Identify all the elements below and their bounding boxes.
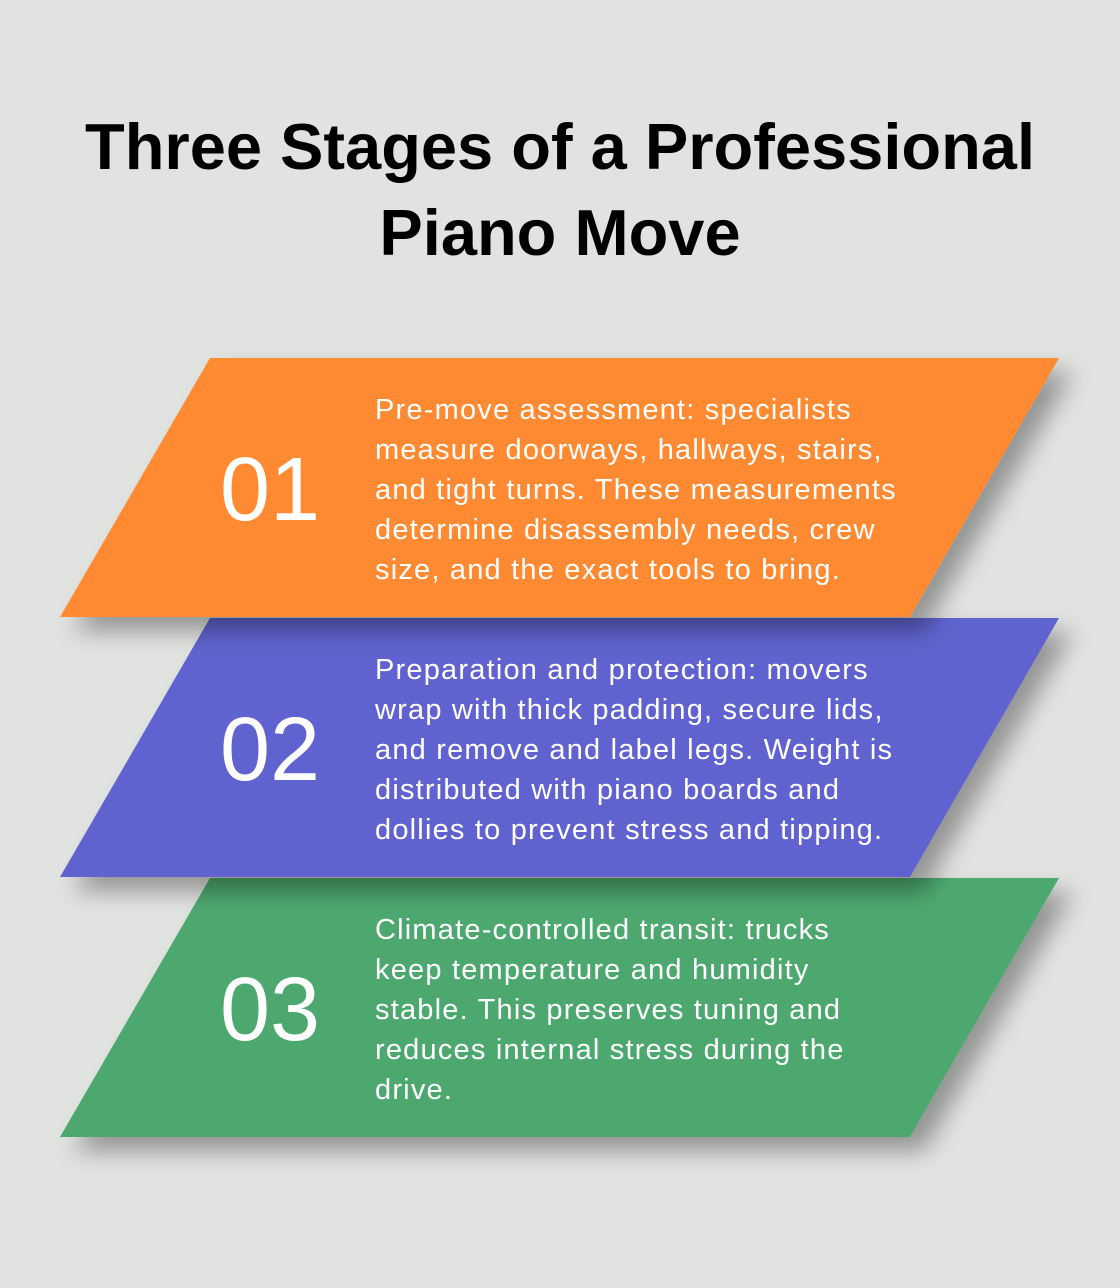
text stage 2: dollies to prevent stress and tipping. (375, 814, 883, 846)
panel: stage 2 (60, 618, 1059, 877)
text stage 1 (375, 394, 897, 586)
text stage 1: Pre-move assessment: specialists (375, 394, 852, 426)
title (85, 110, 1035, 269)
number 03: 03 (220, 960, 320, 1060)
text stage 3 (375, 914, 845, 1106)
text stage 2: Preparation and protection: movers (375, 654, 869, 686)
text stage 3: reduces internal stress during the (375, 1034, 845, 1066)
text stage 3: Climate-controlled transit: trucks (375, 914, 830, 946)
title: Three Stages of a Professional (85, 110, 1035, 183)
panel: stage 1 (60, 358, 1059, 617)
title: Piano Move (379, 196, 741, 269)
text stage 2 (375, 654, 893, 846)
text stage 3: stable. This preserves tuning and (375, 994, 841, 1026)
text stage 3: drive. (375, 1074, 453, 1106)
text stage 1: measure doorways, hallways, stairs, (375, 434, 883, 466)
text stage 2: wrap with thick padding, secure lids, (375, 694, 884, 726)
text stage 1: determine disassembly needs, crew (375, 514, 876, 546)
text stage 2: and remove and label legs. Weight is (375, 734, 893, 766)
text stage 2: distributed with piano boards and (375, 774, 840, 806)
text stage 3: keep temperature and humidity (375, 954, 810, 986)
panel: stage 3 (60, 878, 1059, 1137)
number 01: 01 (220, 440, 320, 540)
number 02: 02 (220, 700, 320, 800)
text stage 1: and tight turns. These measurements (375, 474, 897, 506)
text stage 1: size, and the exact tools to bring. (375, 554, 841, 586)
